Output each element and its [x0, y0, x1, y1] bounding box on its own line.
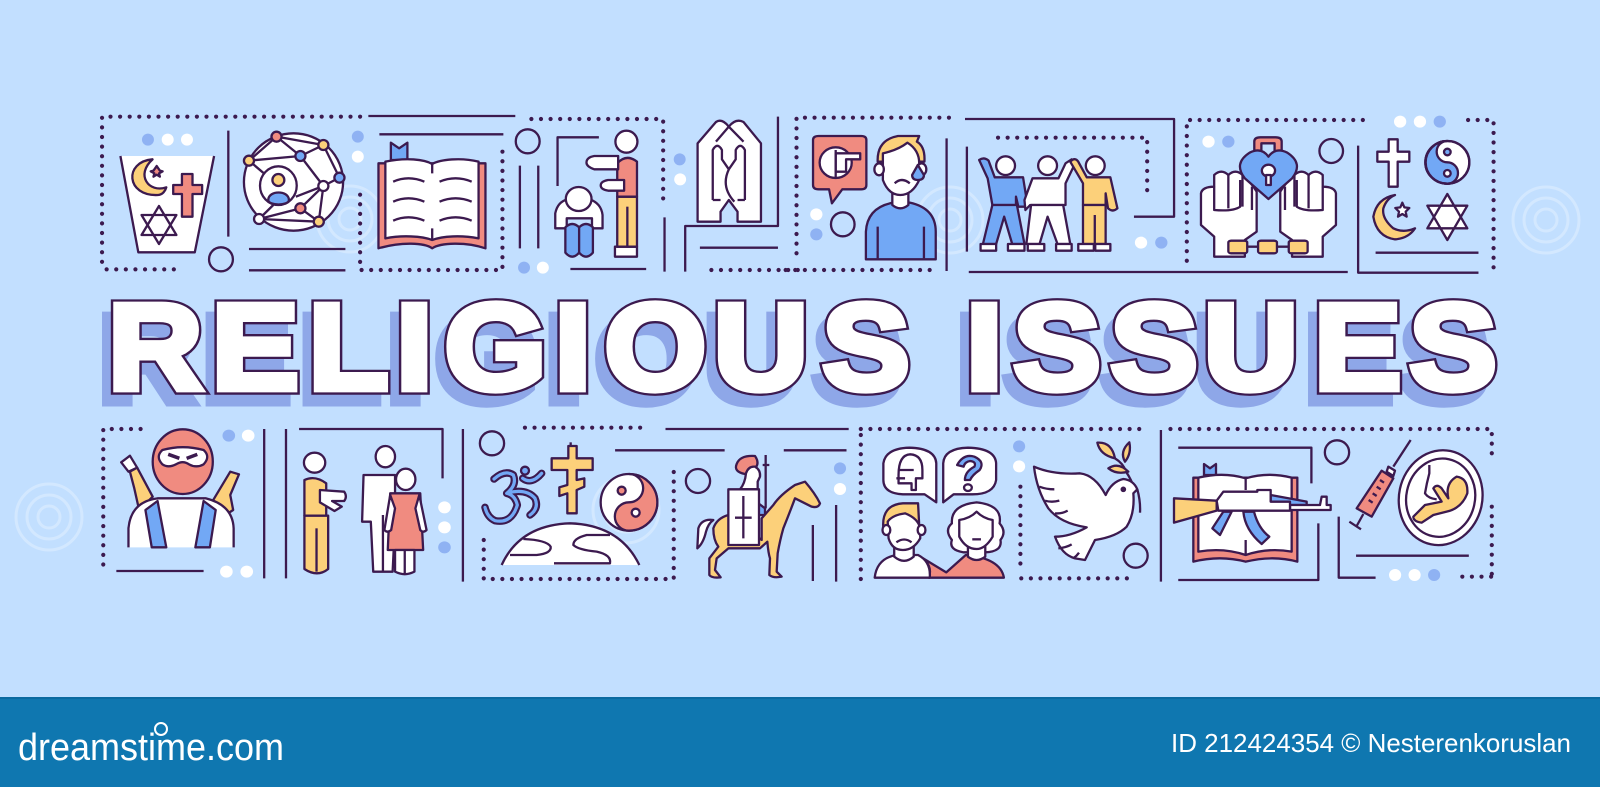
icon: questioning couple with speech bubbles [875, 448, 1004, 578]
icon: person scolding seated person [555, 131, 637, 257]
icon: man turned away from couple [304, 446, 427, 574]
icon: religions in a container [120, 156, 214, 252]
top row right icons [786, 116, 1494, 275]
icon: accused man with speech bubble [813, 136, 936, 259]
icon: peace dove with olive branch [1034, 442, 1148, 568]
icon: open book [378, 143, 485, 248]
icon: crusader knight on horse [697, 455, 820, 578]
bottom row right icons [834, 429, 1492, 582]
icon: chained fists with heart lock [1201, 137, 1336, 257]
icon: syringe and fetus [1349, 440, 1491, 553]
bottom row left icons [103, 428, 840, 582]
icon: masked terrorist with rifles [121, 429, 239, 547]
icon: praying hands [698, 121, 761, 222]
icon: network globe [244, 132, 344, 231]
icon: three people high five [979, 156, 1117, 251]
top row left icons [102, 116, 800, 274]
icon: religions over earth [485, 442, 657, 565]
title: RELIGIOUS ISSUES [108, 279, 1497, 415]
footer credit: ID 212424354 © Nesterenkoruslan [1171, 728, 1571, 758]
footer band [0, 697, 1600, 787]
icon: cross, yin yang, crescent and star [1373, 139, 1469, 240]
icon: rifle over holy book [1174, 464, 1331, 562]
footer logo: dreamstime.com [18, 727, 284, 769]
title: RELIGIOUS ISSUES [99, 291, 1488, 427]
title: RELIGIOUS ISSUES [108, 279, 1497, 415]
